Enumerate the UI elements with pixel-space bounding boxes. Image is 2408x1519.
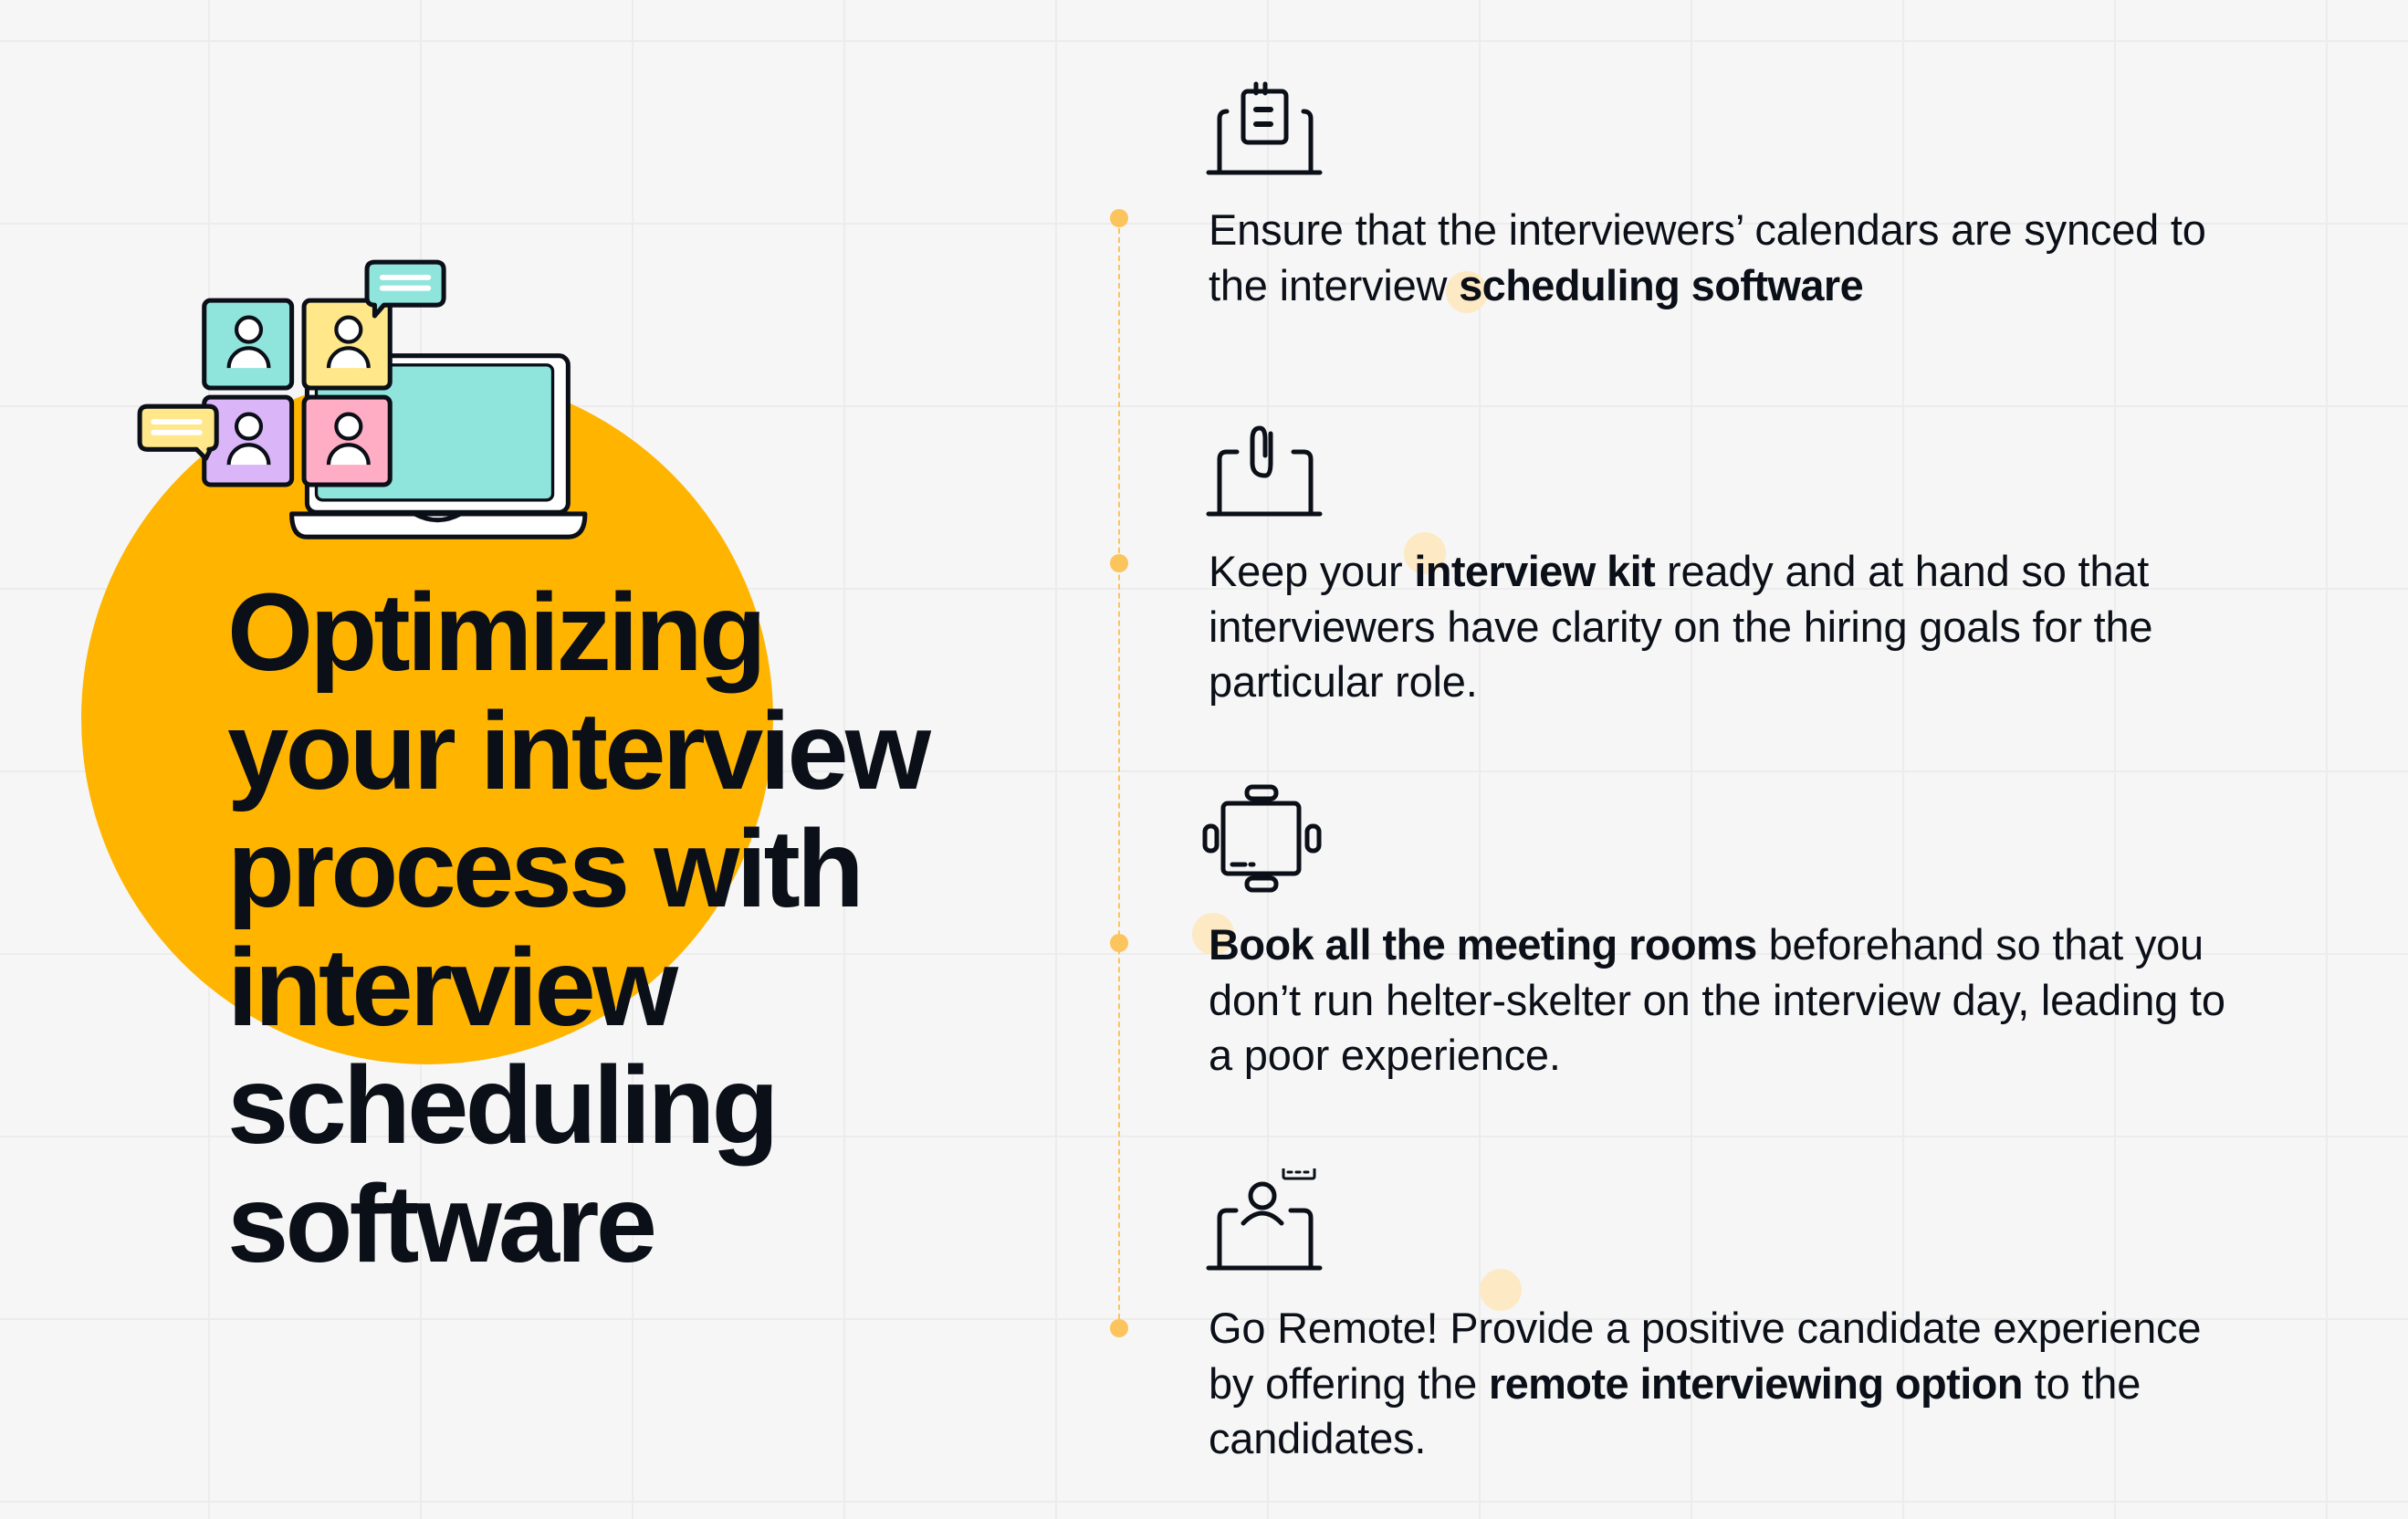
text 4: candidates. xyxy=(1209,1414,1426,1462)
title: process with xyxy=(227,806,861,930)
text 3: Book all the meeting rooms beforehand so that you xyxy=(1209,920,2204,969)
title: software xyxy=(227,1161,654,1285)
title: scheduling xyxy=(227,1042,776,1167)
text 1 xyxy=(1209,205,2206,309)
tiles xyxy=(204,300,390,485)
timeline xyxy=(1118,219,1120,1328)
text 4: Go Remote! Provide a positive candidate experience xyxy=(1209,1304,2201,1352)
text 2: interviewers have clarity on the hiring goals for the xyxy=(1209,602,2152,650)
text 3: a poor experience. xyxy=(1209,1031,1561,1079)
text 1: Ensure that the interviewers’ calendars are synced to xyxy=(1209,205,2206,254)
text 4: by offering the remote interviewing option to the xyxy=(1209,1358,2141,1408)
text 2 xyxy=(1209,547,2152,706)
yellow circle xyxy=(81,372,773,1064)
title xyxy=(227,570,931,1285)
title: your interview xyxy=(227,688,927,812)
text 4 xyxy=(1209,1304,2201,1462)
bubbles xyxy=(140,262,444,458)
title: interview xyxy=(227,924,675,1048)
icon: paperclip xyxy=(1207,425,1322,517)
illustration: video call laptop xyxy=(137,259,588,540)
text 2: Keep your interview kit ready and at hand so that xyxy=(1209,547,2149,595)
icon: meeting table xyxy=(1203,785,1322,893)
text 3 xyxy=(1209,920,2225,1079)
text 1: the interview scheduling software xyxy=(1209,261,1863,309)
text 3: don’t run helter-skelter on the interview day, leading to xyxy=(1209,975,2225,1024)
icon: calendar clipboard xyxy=(1207,82,1322,175)
text 2: particular role. xyxy=(1209,657,1478,706)
title: Optimizing xyxy=(227,570,763,694)
icon: remote person xyxy=(1207,1168,1322,1271)
laptop xyxy=(292,356,585,537)
